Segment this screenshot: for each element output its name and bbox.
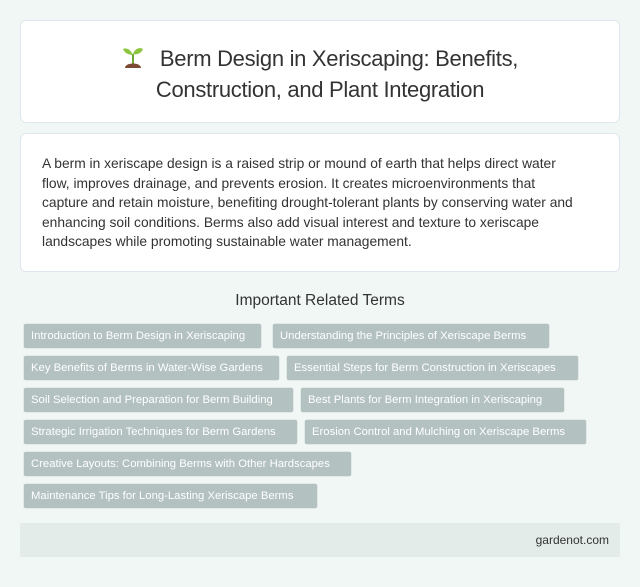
- description card: [20, 133, 620, 272]
- tag 3: Key Benefits of Berms in Water-Wise Gardens: [31, 362, 263, 374]
- description text: A berm in xeriscape design is a raised strip or mound of earth that helps direct water: [42, 156, 556, 171]
- tag 9: [24, 452, 351, 476]
- tag 6: Best Plants for Berm Integration in Xeriscaping: [308, 394, 542, 406]
- tag 9: Creative Layouts: Combining Berms with Other Hardscapes: [31, 458, 330, 470]
- description text: [42, 156, 573, 249]
- terms heading: Important Related Terms: [235, 292, 405, 309]
- tag 10: Maintenance Tips for Long-Lasting Xeriscape Berms: [31, 490, 293, 502]
- title: [123, 46, 518, 102]
- tag 1: [24, 324, 261, 348]
- tag 4: Essential Steps for Berm Construction in Xeriscapes: [294, 362, 556, 374]
- title: Construction, and Plant Integration: [156, 77, 484, 102]
- tag 5: [24, 388, 293, 412]
- tag 2: Understanding the Principles of Xeriscape Berms: [280, 330, 526, 342]
- footer: [20, 523, 620, 557]
- terms tags: [24, 324, 586, 508]
- description text: landscapes while promoting sustainable water management.: [42, 234, 412, 249]
- tag 6: [301, 388, 564, 412]
- title: Berm Design in Xeriscaping: Benefits,: [160, 46, 518, 71]
- footer text: gardenot.com: [536, 533, 609, 547]
- tag 4: [287, 356, 578, 380]
- tag 2: [273, 324, 549, 348]
- description text: enhancing soil conditions. Berms also add visual interest and texture to xeriscape: [42, 214, 539, 230]
- header card: [20, 20, 620, 123]
- icon: sprout: [123, 48, 143, 68]
- description text: capture and retain moisture, benefiting drought-tolerant plants by conserving water and: [42, 195, 573, 210]
- tag 7: Strategic Irrigation Techniques for Berm Gardens: [31, 426, 276, 438]
- tag 7: [24, 420, 297, 444]
- description text: flow, improves drainage, and prevents erosion. It creates microenvironments that: [42, 176, 535, 190]
- tag 1: Introduction to Berm Design in Xeriscaping: [31, 330, 245, 342]
- tag 8: Erosion Control and Mulching on Xeriscape Berms: [312, 426, 565, 438]
- tag 3: [24, 356, 279, 380]
- tag 5: Soil Selection and Preparation for Berm Building: [31, 394, 273, 406]
- tag 8: [305, 420, 586, 444]
- tag 10: [24, 484, 317, 508]
